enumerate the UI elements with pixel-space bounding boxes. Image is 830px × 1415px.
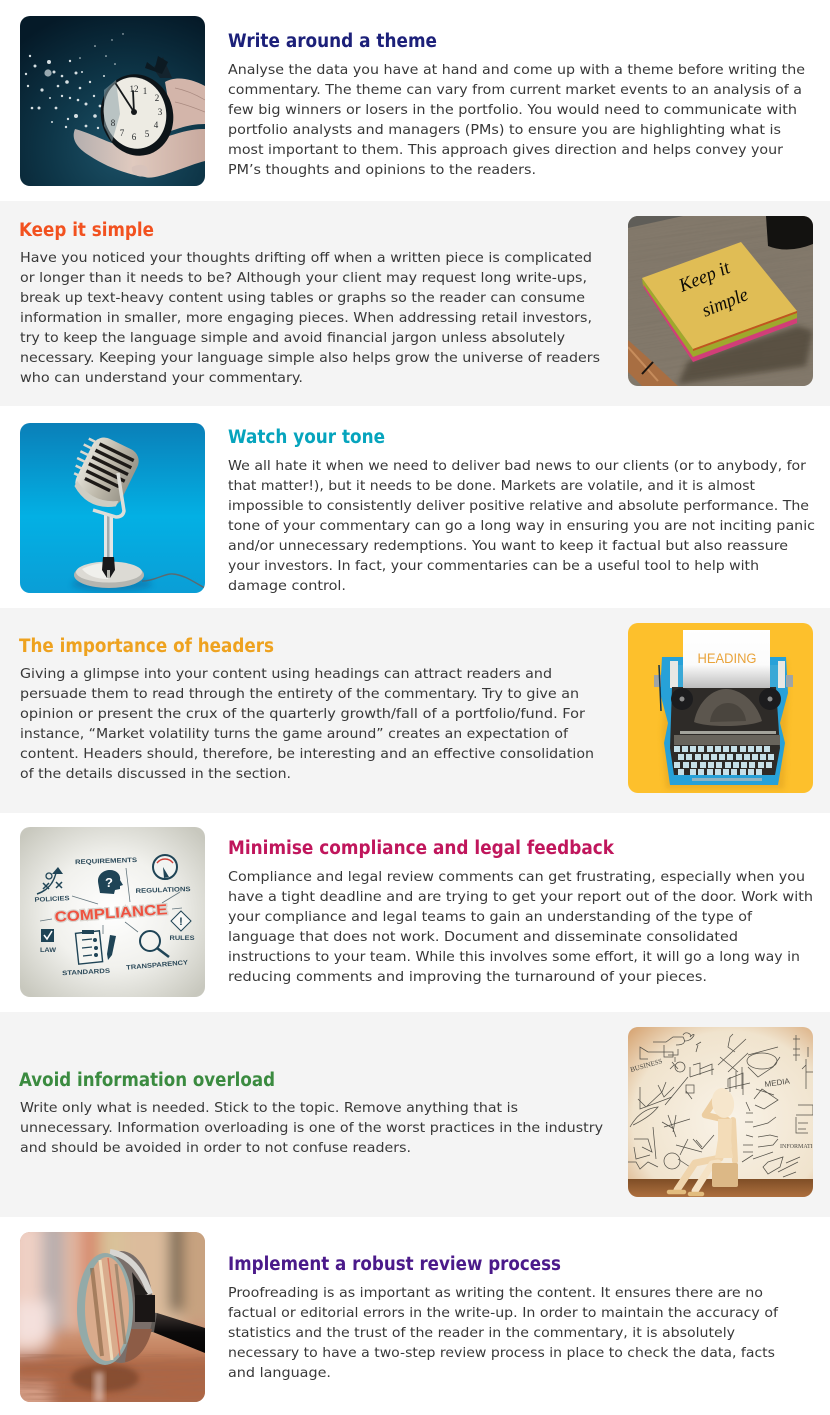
body text: portfolio analysts and managers (PMs) to ensure you are highlighting what is — [228, 122, 781, 138]
icons: ? — [105, 875, 113, 890]
labels: POLICIES — [34, 895, 70, 904]
body text: instance, “Market volatility turns the game around” creates an expectation of — [20, 726, 569, 742]
body text — [228, 62, 805, 178]
body text: statistics and the trust of the reader in the commentary, it is absolutely — [228, 1325, 735, 1341]
image: wooden figure with sketches: INFORMATION — [780, 1144, 822, 1150]
body text: your compliance and legal teams to gain an understanding of the type of — [228, 909, 753, 925]
image: wooden figure with sketches — [628, 1027, 822, 1197]
panel: avoid information overload — [0, 1012, 830, 1217]
paper — [683, 630, 770, 688]
body text: have a tight deadline and are trying to get your report out of the door. Work with — [228, 889, 813, 905]
body text: Analyse the data you have at hand and come up with a theme before writing the — [228, 62, 805, 78]
image: compliance word map — [20, 827, 205, 997]
body text — [228, 869, 813, 985]
body text: and/or unnecessary redemptions. You want to keep it factual but also reassure — [228, 538, 788, 554]
body text: impossible to consistently deliver positive relative and absolute performance. The — [228, 498, 809, 514]
blurred bookshelf — [20, 1232, 205, 1402]
body text: content. Headers should, therefore, be interesting and an effective consolidation — [20, 746, 594, 762]
microphone head — [74, 438, 139, 507]
body text: and language. — [228, 1365, 331, 1381]
image: sticky note on wooden desk — [628, 216, 813, 386]
ribbon spools — [671, 688, 693, 710]
clock: 4 — [154, 120, 159, 130]
labels: STANDARDS — [62, 968, 111, 977]
clock: 8 — [111, 118, 116, 128]
paper: HEADING — [698, 651, 756, 666]
labels: TRANSPARENCY — [126, 959, 189, 972]
body text: most important to them. This approach gives direction and helps convey your — [228, 142, 783, 158]
connector lines — [40, 868, 182, 934]
body text: that matter!), but it needs to be done. Markets are volatile, and it is almost — [228, 478, 755, 494]
typewriter body — [654, 657, 793, 789]
labels: REGULATIONS — [135, 886, 191, 895]
image: vintage microphone — [20, 423, 205, 593]
clock: 12 — [130, 84, 138, 94]
body text — [20, 250, 600, 386]
labels: LAW — [40, 947, 57, 954]
type basket — [694, 689, 762, 726]
clock: 5 — [145, 129, 150, 139]
body text: factual or editorial errors in the write-up. In order to maintain the accuracy of — [228, 1305, 779, 1321]
body text — [228, 1285, 779, 1381]
keys — [674, 746, 774, 775]
body text — [20, 1100, 603, 1156]
heading: Avoid information overload — [19, 1070, 275, 1091]
heading: Keep it simple — [19, 220, 154, 241]
body text: language that does not work. Document and disseminate consolidated — [228, 929, 738, 945]
body text: or longer than it needs to be? Although your client may request long write-ups, — [20, 270, 587, 286]
body text: commentary. The theme can vary from current market events to an analysis of a — [228, 82, 802, 98]
cable — [142, 574, 205, 588]
body text: try to keep the language simple and avoid financial jargon unless absolutely — [20, 330, 565, 346]
lens — [77, 1253, 133, 1365]
pen — [628, 340, 678, 386]
image: magnifying glass on table — [20, 1232, 205, 1402]
rim back — [114, 1251, 152, 1363]
body text: who can understand your commentary. — [20, 370, 303, 386]
body text: Compliance and legal review comments can get frustrating, especially when you — [228, 869, 805, 885]
body text: of the details discussed in the section. — [20, 766, 291, 782]
image: clock dissolving in hands — [20, 16, 205, 186]
heading: The importance of headers — [19, 636, 274, 657]
hands — [74, 79, 205, 178]
labels — [34, 857, 195, 977]
body text: necessary to have a two-step review process in place to check the data, facts — [228, 1345, 775, 1361]
body text: Have you noticed your thoughts drifting off when a written piece is complicated — [20, 250, 592, 266]
panel: minimise compliance and legal feedback — [20, 827, 813, 997]
floor — [628, 1179, 813, 1197]
icons: ! — [179, 916, 183, 928]
icons — [37, 855, 191, 964]
magnifying glass — [77, 1251, 205, 1365]
body text: and should be avoided in order to not confuse readers. — [20, 1140, 411, 1156]
body text: Giving a glimpse into your content using headings can attract readers and — [20, 666, 552, 682]
heading: Implement a robust review process — [228, 1254, 561, 1275]
sticky note — [642, 242, 797, 362]
clock: 6 — [132, 132, 137, 142]
body text: persuade them to read through the entirety of the commentary. Try to give an — [20, 686, 579, 702]
wooden figure — [669, 1095, 735, 1194]
body text: few big winners or losers in the portfolio. You would need to communicate with — [228, 102, 797, 118]
coffee mug — [766, 216, 813, 250]
clock: 2 — [155, 93, 159, 103]
body text: information in smaller, more engaging pieces. When addressing retail investors, — [20, 310, 592, 326]
base — [72, 562, 152, 591]
body text: instructions to your team. While this involves some effort, it will go a long way in — [228, 949, 800, 965]
heading: Write around a theme — [228, 31, 437, 52]
panel: write around a theme — [20, 16, 805, 186]
sketches — [628, 1033, 813, 1177]
labels: RULES — [170, 935, 195, 942]
body text: Proofreading is as important as writing the content. It ensures there are no — [228, 1285, 763, 1301]
body text: your investors. In fact, your commentaries can be a useful tool to help with — [228, 558, 759, 574]
body text: unnecessary. Information overloading is one of the worst practices in the industry — [20, 1120, 603, 1136]
image: wooden figure with sketches: MEDIA — [764, 1076, 791, 1089]
main word: COMPLIANCE — [54, 902, 168, 926]
clock — [100, 56, 174, 156]
panel: the importance of headers — [0, 608, 830, 813]
body text: damage control. — [228, 578, 346, 594]
labels: REQUIREMENTS — [75, 857, 138, 866]
body text: tone of your commentary can go a long way in ensuring you are not inciting panic — [228, 518, 815, 534]
body text: necessary. Keeping your language simple also helps grow the universe of readers — [20, 350, 600, 366]
body text: break up text-heavy content using tables or graphs so the reader can consume — [20, 290, 585, 306]
lens reflections — [92, 1258, 125, 1360]
panel: implement a robust review process — [20, 1232, 778, 1402]
sticky note: Keep it — [675, 257, 734, 297]
body text — [20, 666, 594, 782]
panel: keep it simple — [0, 201, 830, 406]
body text: reducing comments and improving the turnaround of your pieces. — [228, 969, 707, 985]
body text: Write only what is needed. Stick to the topic. Remove anything that is — [20, 1100, 518, 1116]
handle — [153, 1312, 205, 1353]
body text: We all hate it when we need to deliver bad news to our clients (or to anybody, for — [228, 458, 806, 474]
body text: opinion or present the crux of the quarterly growth/fall of a portfolio/fund. For — [20, 706, 585, 722]
clock: 1 — [143, 86, 147, 96]
image: wooden figure with sketches: BUSINESS — [629, 1057, 663, 1074]
body text — [228, 458, 815, 594]
heading: Minimise compliance and legal feedback — [228, 838, 615, 859]
panel: watch your tone — [20, 423, 815, 594]
clock: 3 — [158, 107, 163, 117]
heading: Watch your tone — [228, 427, 385, 448]
body text: PM’s thoughts and opinions to the readers. — [228, 162, 536, 178]
clock: 7 — [120, 128, 125, 138]
stem — [102, 515, 115, 578]
sticky note: simple — [699, 284, 751, 322]
image: typewriter with heading page — [628, 623, 813, 793]
